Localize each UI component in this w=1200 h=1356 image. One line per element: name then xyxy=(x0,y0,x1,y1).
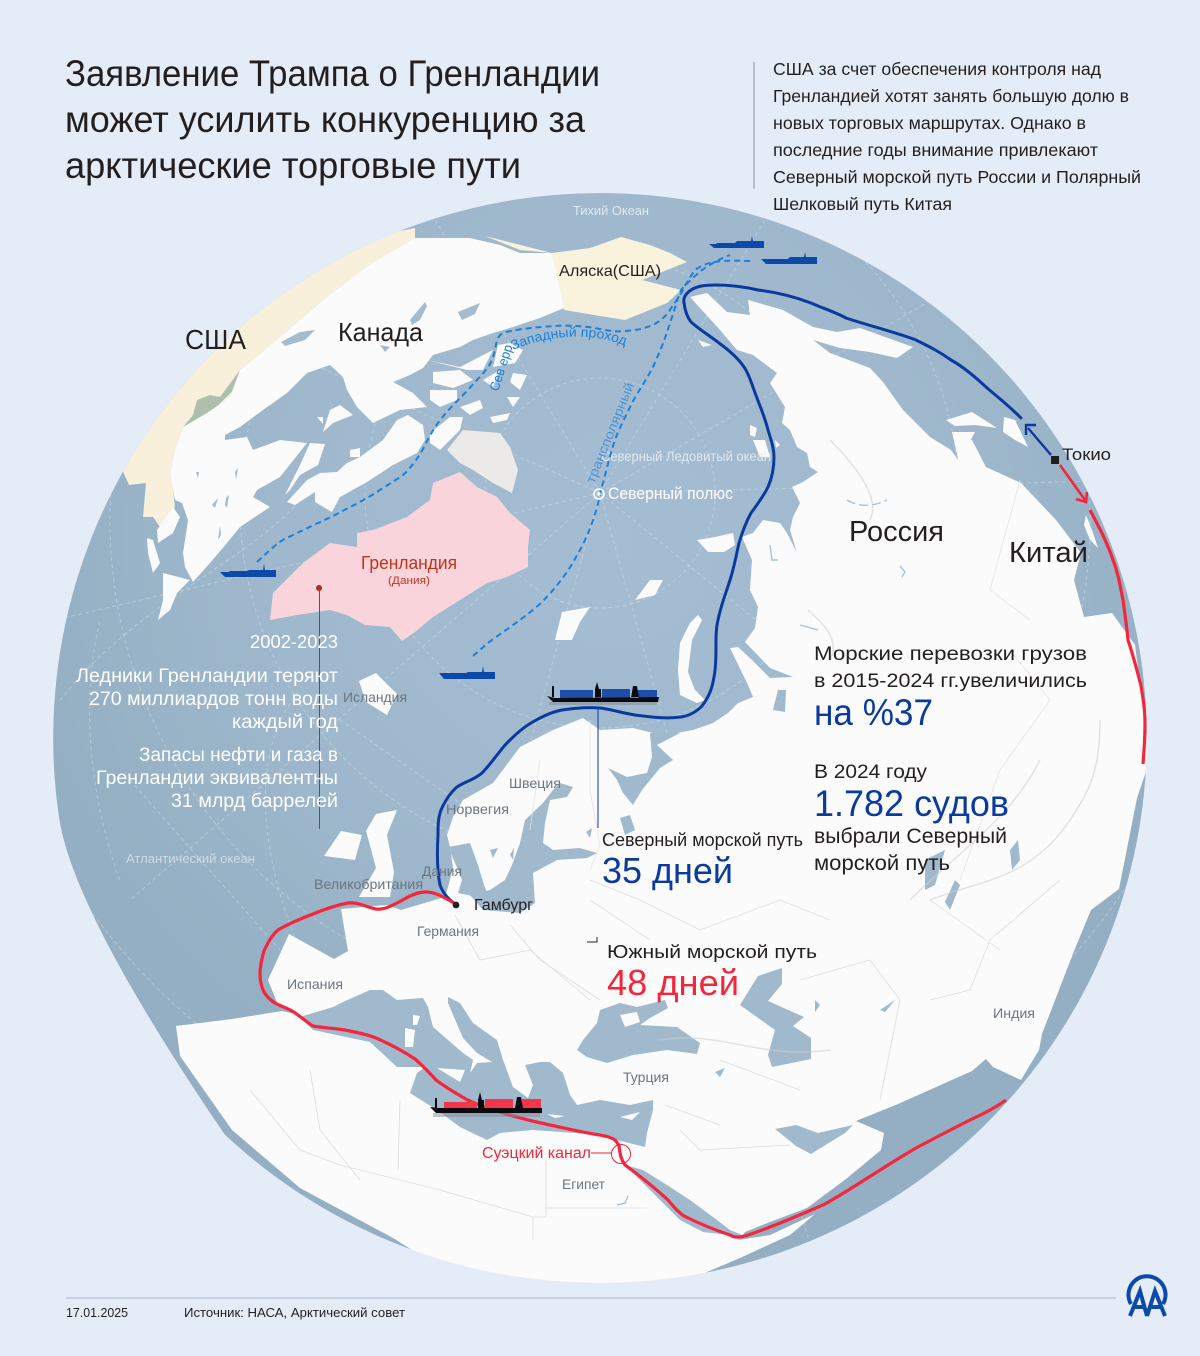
Northern route leader line xyxy=(597,708,599,828)
land: Canadian lakes xyxy=(196,302,480,540)
land: Canadian Arctic islands xyxy=(147,343,527,620)
land: Canada xyxy=(170,238,564,582)
stat: cargo growth: на %37 xyxy=(814,692,933,733)
Northwest passage labels: Сев ерр xyxy=(487,343,516,393)
icon: AA logo xyxy=(1128,1276,1166,1316)
North Sea Route line xyxy=(437,285,1021,903)
intro text block xyxy=(754,59,1141,214)
title: может усилить конкуренцию за xyxy=(65,99,585,140)
icon: red container ship xyxy=(430,1092,542,1117)
country and sea labels: Швеция xyxy=(509,775,561,791)
Suez canal callout xyxy=(482,1144,630,1164)
North route arrow to Tokyo xyxy=(1026,425,1051,455)
footer: Источник: НАСА, Арктический совет xyxy=(184,1306,405,1320)
Kattegat xyxy=(450,843,486,896)
Northern route text: Северный морской путь xyxy=(602,830,803,850)
land: USA beige xyxy=(120,228,415,527)
Tokyo marker: Токио xyxy=(1062,445,1111,464)
rivers and pale lakes xyxy=(617,500,905,1205)
stat: ships count: морской путь xyxy=(814,852,950,875)
dashed route: Transpolar xyxy=(473,255,730,656)
Greenland label: Гренландия xyxy=(361,553,457,573)
stat: ships count: 1.782 судов xyxy=(814,783,1009,824)
intro text block: Шелковый путь Китая xyxy=(773,194,952,214)
Northwest passage labels xyxy=(487,326,626,393)
country and sea labels: Атлантический океан xyxy=(126,851,255,866)
Northern route text xyxy=(602,830,803,891)
Southern route text: 48 дней xyxy=(607,962,739,1003)
USA label: США xyxy=(185,324,246,355)
Greenland callout: 31 млрд баррелей xyxy=(171,791,338,812)
South Sea Route line xyxy=(260,892,1006,1237)
islands xyxy=(324,340,1098,1120)
Transpolar label: трансполярный xyxy=(583,380,637,485)
Northern route text: 35 дней xyxy=(602,850,733,891)
Greenland callout: 2002-2023 xyxy=(250,632,338,652)
Baltic xyxy=(470,783,597,913)
White Sea xyxy=(608,733,680,805)
country and sea labels: Великобритания xyxy=(314,876,423,892)
icon: small ship transpolar xyxy=(439,666,495,679)
Southern route text xyxy=(607,942,817,1003)
dashed route: Northwest passage xyxy=(257,261,751,562)
country borders xyxy=(250,480,1060,1240)
Canada label: Канада xyxy=(338,317,424,347)
Northwest passage labels: Западный проход xyxy=(510,326,626,349)
seas and inland water xyxy=(300,690,1020,1237)
title: Заявление Трампа о Гренландии xyxy=(65,53,600,94)
intro text block: последние годы внимание привлекают xyxy=(773,140,1098,160)
country and sea labels: Исландия xyxy=(343,689,407,705)
China label: Китай xyxy=(1009,537,1088,569)
footer: 17.01.2025 xyxy=(66,1306,128,1320)
footer xyxy=(66,1298,1116,1320)
land: Greenland xyxy=(270,472,530,641)
Suez canal callout: Суэцкий канал xyxy=(482,1145,591,1162)
Hamburg marker: Гамбург xyxy=(474,897,533,914)
Persian Gulf xyxy=(775,1125,853,1154)
stat: cargo growth xyxy=(814,643,1087,733)
South route leader mark xyxy=(587,937,597,942)
Pechora notch xyxy=(773,690,786,712)
country and sea labels: Дания xyxy=(422,863,462,879)
stat: cargo growth: Морские перевозки грузов xyxy=(814,643,1087,665)
icon: small ship top 1 xyxy=(709,236,764,248)
stat: ships count xyxy=(814,761,1009,875)
Southern route text: Южный морской путь xyxy=(607,942,817,962)
country and sea labels: Турция xyxy=(623,1069,669,1085)
title: арктические торговые пути xyxy=(65,145,521,186)
country and sea labels: Норвегия xyxy=(446,801,509,817)
Greenland callout: 270 миллиардов тонн воды xyxy=(89,689,338,710)
icon: small ship west xyxy=(220,564,276,577)
Greenland callout: Ледники Гренландии теряют xyxy=(76,666,338,687)
intro text block: США за счет обеспечения контроля над xyxy=(773,59,1101,79)
country and sea labels: Египет xyxy=(562,1176,606,1192)
Pacific label: Тихий Океан xyxy=(573,203,649,218)
Greenland label: (Дания) xyxy=(388,575,430,587)
Mediterranean xyxy=(300,990,653,1147)
country and sea labels: Германия xyxy=(417,923,479,939)
land: Great Lakes xyxy=(183,370,240,430)
North Pole marker: Северный полюс xyxy=(608,485,733,503)
land: Eurasia and Africa xyxy=(176,293,1150,1300)
mountain shading xyxy=(660,440,1100,1052)
title xyxy=(65,53,600,186)
Black Sea xyxy=(577,1000,700,1063)
South route from Tokyo xyxy=(1060,465,1145,764)
Greenland label xyxy=(361,553,457,587)
stat: ships count: выбрали Северный xyxy=(814,825,1007,848)
Red Sea xyxy=(629,1166,742,1236)
stat: ships count: В 2024 году xyxy=(814,761,927,783)
ocean xyxy=(53,193,1147,1283)
intro text block: Гренландией хотят занять большую долю в xyxy=(773,86,1129,106)
land: Alaska xyxy=(485,236,687,320)
country and sea labels xyxy=(126,689,1035,1192)
icon: small ship top 2 xyxy=(761,252,817,264)
Arctic Ocean label: Северный Ледовитый океан xyxy=(601,449,771,464)
Greenland callout xyxy=(76,585,338,829)
Russia label: Россия xyxy=(849,516,944,548)
country and sea labels: Индия xyxy=(993,1005,1035,1021)
Greenland callout: Запасы нефти и газа в xyxy=(139,745,338,766)
stat: cargo growth: в 2015-2024 гг.увеличились xyxy=(814,670,1087,692)
intro text block: Северный морской путь России и Полярный xyxy=(773,167,1141,187)
Alaska label: Аляска(США) xyxy=(559,263,661,280)
Greenland callout: каждый год xyxy=(232,712,338,733)
globe map xyxy=(53,193,1147,1283)
Greenland callout: Гренландии эквивалентны xyxy=(96,768,338,789)
Caspian xyxy=(740,968,811,1067)
lakes xyxy=(620,815,635,835)
intro text block: новых торговых маршрутах. Однако в xyxy=(773,113,1086,133)
icon: blue container ship xyxy=(547,682,659,705)
country and sea labels: Испания xyxy=(287,976,343,992)
